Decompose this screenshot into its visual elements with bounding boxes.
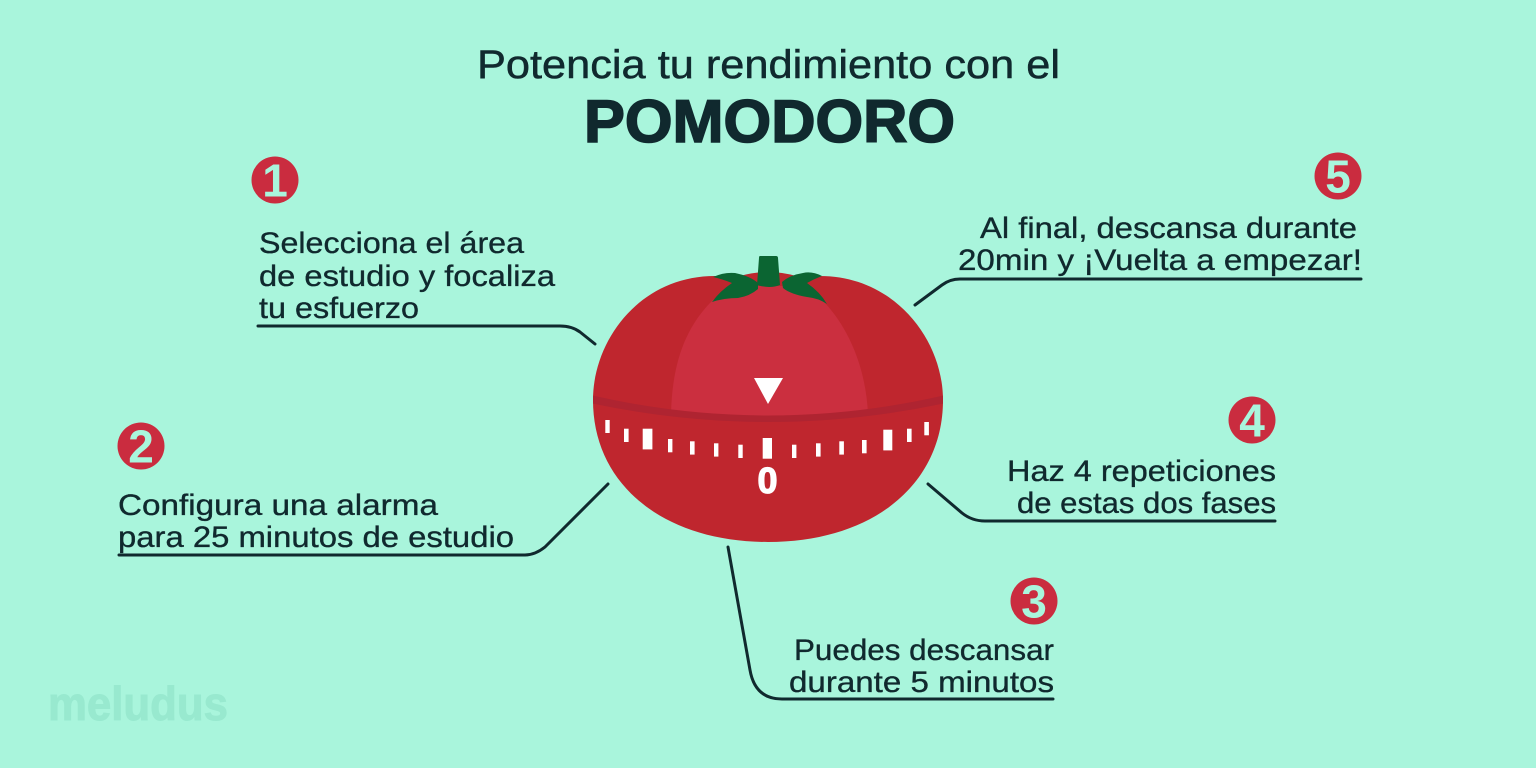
text 2: para 25 minutos de estudio — [118, 521, 514, 554]
timer band — [590, 395, 946, 422]
badge 3 — [1010, 576, 1058, 628]
badge 2: 2 — [128, 420, 154, 472]
text 2 — [118, 489, 514, 554]
step 2 — [118, 420, 608, 555]
text 4 — [1007, 455, 1276, 520]
step 3 — [728, 547, 1058, 699]
minute ticks — [605, 420, 929, 459]
badge 4: 4 — [1239, 394, 1265, 446]
stem — [757, 256, 780, 287]
badge 2 — [118, 420, 164, 472]
badge 5: 5 — [1325, 150, 1351, 202]
badge 3: 3 — [1021, 576, 1047, 628]
leaves — [712, 272, 827, 304]
text 3 — [789, 634, 1054, 699]
text 4: de estas dos fases — [1017, 487, 1276, 520]
text 4: Haz 4 repeticiones — [1007, 455, 1276, 488]
leader line 5 — [915, 279, 1361, 305]
text 5: Al final, descansa durante — [980, 212, 1357, 245]
badge 4 — [1228, 394, 1276, 446]
title — [477, 43, 1060, 155]
tomato timer — [590, 256, 946, 542]
title: POMODORO — [584, 88, 955, 155]
step 5 — [915, 150, 1362, 305]
leader line 4 — [928, 484, 1275, 521]
leader line 2 — [119, 484, 608, 555]
tomato centre lobe — [671, 286, 868, 421]
text 2: Configura una alarma — [118, 489, 438, 522]
tomato body — [593, 272, 943, 542]
text 3: Puedes descansar — [794, 634, 1054, 667]
logo: meludus: meludus — [48, 677, 228, 730]
text 1: tu esfuerzo — [259, 292, 419, 325]
zero label: 0 — [757, 460, 778, 501]
text 5 — [958, 212, 1362, 277]
text 5: 20min y ¡Vuelta a empezar! — [958, 244, 1362, 277]
leader line 1 — [258, 326, 595, 344]
pointer triangle — [754, 378, 783, 404]
step 4 — [928, 394, 1276, 521]
leader line 3 — [728, 547, 1053, 699]
badge 1 — [252, 154, 298, 206]
text 1 — [259, 227, 555, 325]
badge 5 — [1314, 150, 1362, 202]
badge 1: 1 — [262, 154, 288, 206]
text 1: de estudio y focaliza — [259, 260, 555, 293]
title: Potencia tu rendimiento con el — [477, 43, 1060, 87]
text 3: durante 5 minutos — [789, 666, 1054, 699]
step 1 — [252, 154, 595, 344]
text 1: Selecciona el área — [259, 227, 524, 260]
